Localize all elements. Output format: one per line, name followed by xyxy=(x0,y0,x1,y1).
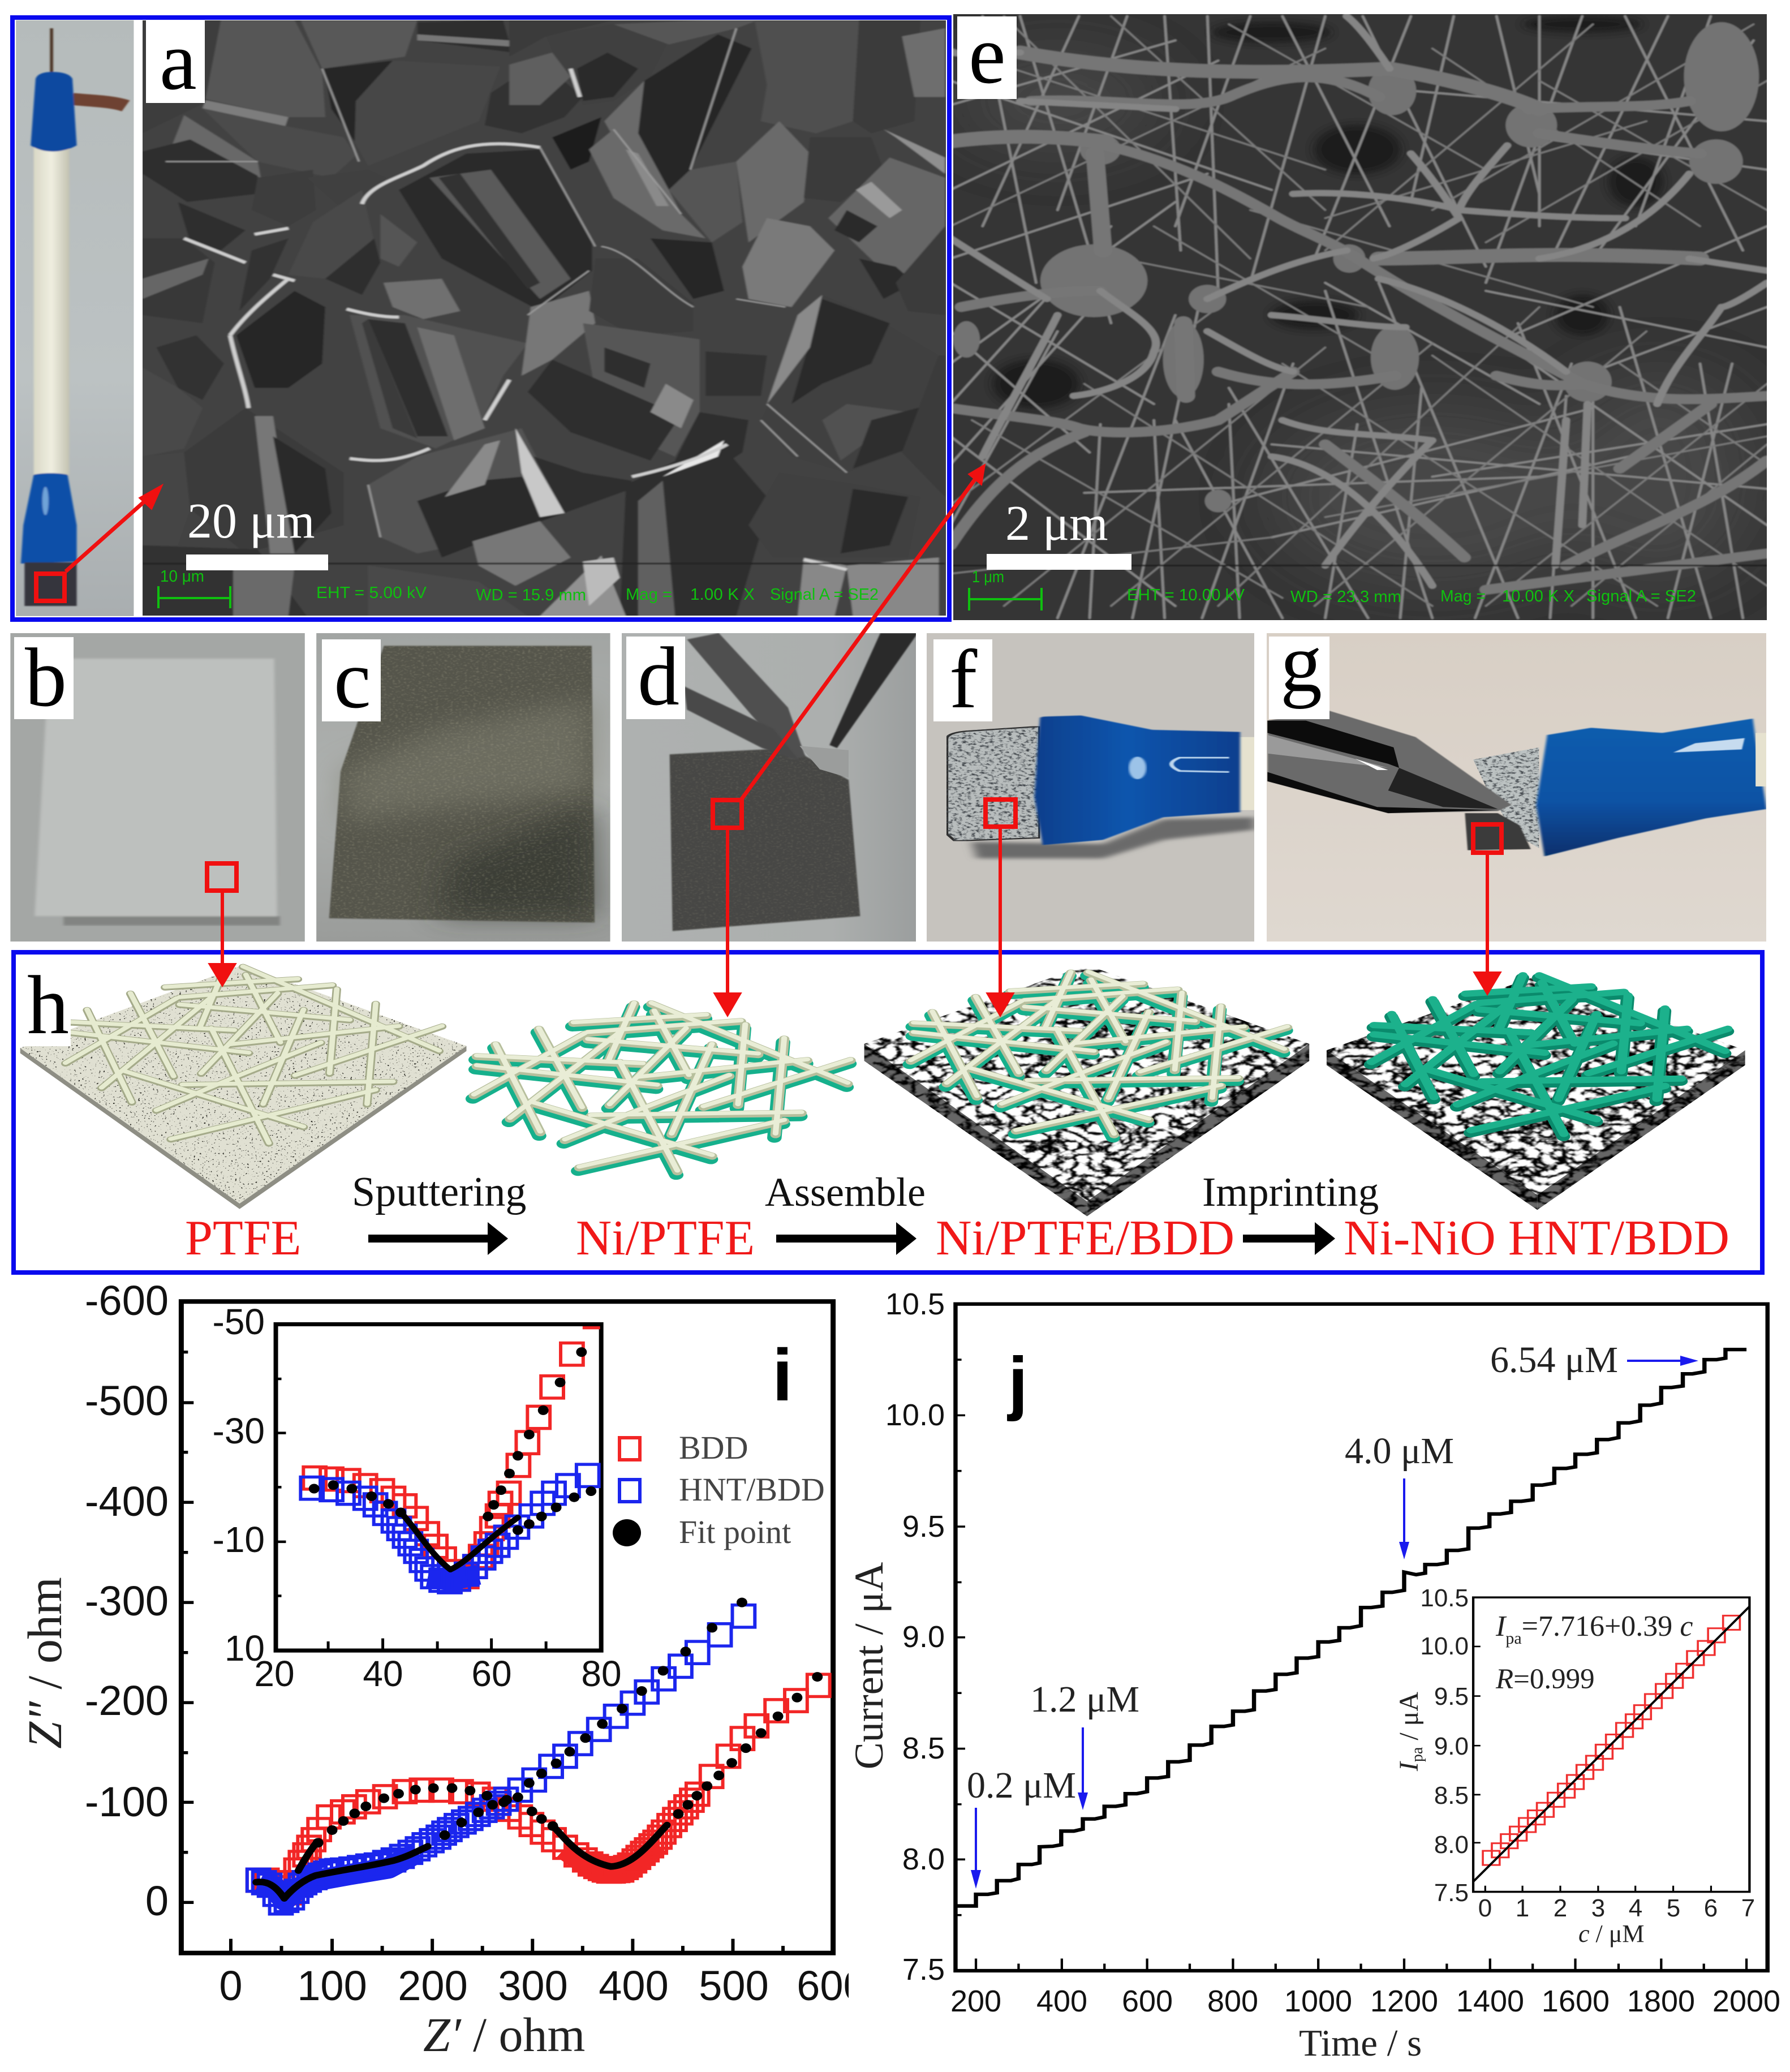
legend i xyxy=(613,1429,825,1550)
data: BDD squares xyxy=(259,1686,819,1893)
inset chart j: calibration: 3 xyxy=(1591,1894,1605,1922)
scale bar text a: 20 μm xyxy=(187,494,315,549)
label c xyxy=(322,633,381,726)
SEM info strip e: Mag = xyxy=(1440,587,1486,605)
panel frame a xyxy=(12,18,949,620)
annotation 1.2 μM xyxy=(1030,1679,1139,1810)
diagram: Ni/PTFE network xyxy=(473,1003,851,1175)
inset chart j: calibration: 10.5 xyxy=(1420,1584,1469,1612)
arrow: imprinting xyxy=(1243,1222,1335,1255)
annotation 4.0 μM: 4.0 μM xyxy=(1345,1430,1454,1472)
trace: current staircase xyxy=(956,1349,1746,1906)
scale bar e xyxy=(987,554,1131,570)
axis tick x labels i: 100 xyxy=(297,1962,367,2009)
y tick labels j: 8.5 xyxy=(902,1731,945,1765)
annotation 0.2 μM xyxy=(967,1765,1076,1889)
inset chart j: calibration: I xyxy=(1495,1610,1507,1643)
diagram: PTFE rods xyxy=(66,966,442,1144)
axis ticks y labels i: -300 xyxy=(85,1577,169,1624)
annotation 6.54 μM: 6.54 μM xyxy=(1490,1339,1618,1381)
label e xyxy=(957,8,1017,101)
inset tick labels i xyxy=(213,1301,622,1694)
inset tick labels i: 10 xyxy=(225,1628,265,1669)
y tick labels j: 10.0 xyxy=(885,1398,945,1432)
material label: PTFE: PTFE xyxy=(185,1211,301,1266)
axes and ticks i xyxy=(181,1301,833,1953)
inset chart j: calibration: 5 xyxy=(1667,1894,1680,1922)
data: fit points xyxy=(256,1602,817,1898)
inset chart j: calibration: c xyxy=(1680,1610,1693,1643)
axis title x j: Time / s xyxy=(1299,2022,1422,2064)
axis tick x labels i: 200 xyxy=(398,1962,468,2009)
square on d and arrow to e xyxy=(713,465,985,1016)
inset chart j: calibration: 8.5 xyxy=(1434,1782,1469,1809)
SEM info strip e: WD = 23.3 mm xyxy=(1290,588,1401,606)
axis ticks y labels i: -500 xyxy=(85,1377,169,1424)
label e: e xyxy=(969,8,1006,101)
axis ticks y labels i: -100 xyxy=(85,1778,169,1825)
inset tick labels i: -50 xyxy=(213,1301,265,1342)
x tick labels j: 1800 xyxy=(1627,1984,1695,2018)
x tick labels j xyxy=(950,1984,1780,2018)
annotation 1.2 μM: 1.2 μM xyxy=(1030,1679,1139,1720)
SEM info strip a: 10 μm xyxy=(160,568,204,586)
diagram: Ni-NiO HNT/BDD electrode xyxy=(1327,975,1745,1210)
legend i: Fit point xyxy=(679,1514,791,1550)
label d: d xyxy=(638,630,679,723)
scale bar text e: 2 μm xyxy=(1005,496,1108,551)
label g xyxy=(1269,617,1329,719)
inset chart j: calibration: I xyxy=(1394,1761,1424,1772)
legend i: BDD xyxy=(679,1429,748,1466)
SEM info strip e xyxy=(969,568,1696,611)
square on g and arrow to HNT/BDD xyxy=(1473,824,1501,995)
inset chart j: calibration: pa xyxy=(1505,1629,1522,1648)
axes and ticks j xyxy=(956,1304,1767,1971)
material label: Ni/PTFE: Ni/PTFE xyxy=(576,1210,755,1265)
label a: a xyxy=(160,15,197,108)
square on f and arrow to Ni/PTFE/BDD xyxy=(986,799,1016,1016)
icon: sleeve highlight xyxy=(42,487,49,515)
x tick labels j: 600 xyxy=(1122,1984,1173,2018)
arrow: sputtering xyxy=(368,1222,508,1255)
inset chart j: calibration: 2 xyxy=(1554,1894,1567,1922)
annotation 4.0 μM xyxy=(1345,1430,1454,1559)
SEM info strip a: EHT = 5.00 kV xyxy=(316,584,427,602)
SEM info strip e: 10.00 K X xyxy=(1502,587,1574,605)
y tick labels j: 9.5 xyxy=(902,1510,945,1544)
chart i: Nyquist plot xyxy=(18,1277,867,2062)
panel f: assembled electrode photo xyxy=(925,632,1257,944)
inset tick labels i: 80 xyxy=(581,1653,622,1694)
label f xyxy=(933,633,992,726)
arrow: assemble xyxy=(776,1222,916,1255)
inset tick labels i: -10 xyxy=(213,1519,265,1560)
icon: copper lead xyxy=(72,99,126,106)
step label: Assemble: Assemble xyxy=(765,1170,926,1215)
square on electrode tip and arrow to a xyxy=(36,485,162,601)
axis title x i: Z′ / ohm xyxy=(423,2007,585,2062)
axis ticks y labels i xyxy=(85,1277,169,1924)
panel h: fabrication schematic xyxy=(14,952,1762,1273)
y tick labels j: 7.5 xyxy=(902,1953,945,1987)
label c: c xyxy=(334,633,371,726)
axis title y i: Z″ / ohm xyxy=(18,1577,72,1749)
SEM info strip a: 1.00 K X xyxy=(690,586,755,604)
x tick labels j: 1000 xyxy=(1284,1984,1352,2018)
legend i: HNT/BDD xyxy=(679,1471,825,1508)
inset chart j: calibration: 8.0 xyxy=(1434,1831,1469,1859)
icon: blue lower sleeve xyxy=(21,473,77,564)
inset tick labels i: -30 xyxy=(213,1411,265,1451)
annotation 6.54 μM xyxy=(1490,1339,1698,1381)
frame h xyxy=(14,952,1762,1273)
icon: electrode cream tube xyxy=(34,145,70,475)
inset tick labels i: 20 xyxy=(254,1653,295,1694)
step label: Sputtering: Sputtering xyxy=(352,1169,526,1215)
inset chart j: calibration: 0 xyxy=(1478,1894,1492,1922)
label g: g xyxy=(1280,617,1322,710)
inset chart j: calibration: c / μM xyxy=(1578,1920,1644,1948)
x tick labels j: 200 xyxy=(950,1984,1001,2018)
panel label j: j xyxy=(1007,1343,1028,1422)
axis title y j: Current / μA xyxy=(846,1562,892,1769)
label h: h xyxy=(27,959,69,1052)
axis ticks y labels i: 0 xyxy=(145,1877,169,1924)
red callout arrows and zoom squares xyxy=(36,465,1501,1016)
axis ticks y labels i: -200 xyxy=(85,1677,169,1724)
axis tick x labels i: 600 xyxy=(797,1962,867,2009)
panel b: PTFE sheet photo xyxy=(10,633,305,942)
inset tick labels i: 40 xyxy=(363,1653,403,1694)
y tick labels j: 9.0 xyxy=(902,1620,945,1654)
inset chart j: calibration: 4 xyxy=(1629,1894,1642,1922)
axis tick x labels i: 300 xyxy=(498,1962,568,2009)
panel c: Ni coated sheet photo xyxy=(316,633,610,942)
SEM info strip e: Signal A = SE2 xyxy=(1586,587,1696,605)
annotation 0.2 μM: 0.2 μM xyxy=(967,1765,1076,1806)
inset chart j: calibration xyxy=(1394,1584,1755,1948)
square on b and arrow to PTFE xyxy=(207,863,236,986)
SEM info strip e: 1 μm xyxy=(972,568,1004,586)
SEM info strip a: Signal A = SE2 xyxy=(770,586,879,604)
SEM info strip a: WD = 15.9 mm xyxy=(476,586,586,604)
inset chart j: calibration: 9.5 xyxy=(1434,1683,1469,1710)
panel a: electrode photo xyxy=(16,20,134,616)
y tick labels j xyxy=(885,1287,945,1987)
axis ticks y labels i: -400 xyxy=(85,1478,169,1525)
label b: b xyxy=(25,631,67,724)
inset chart j: calibration: 10.0 xyxy=(1420,1632,1469,1660)
inset chart j: calibration: 9.0 xyxy=(1434,1733,1469,1760)
icon: blue upper sleeve xyxy=(31,72,77,152)
x tick labels j: 1200 xyxy=(1370,1984,1438,2018)
icon: electrode tip xyxy=(24,562,77,606)
step label: Imprinting: Imprinting xyxy=(1202,1169,1379,1215)
panel a: SEM image of BDD crystals xyxy=(138,18,954,620)
inset chart j: calibration: 1 xyxy=(1516,1894,1529,1922)
axis tick x labels i: 400 xyxy=(599,1962,669,2009)
y tick labels j: 8.0 xyxy=(902,1842,945,1876)
panel g: imprinting electrode with tweezers photo xyxy=(1265,632,1769,944)
SEM info strip a: Mag = xyxy=(626,586,672,604)
panel label i: i xyxy=(772,1334,793,1416)
axis tick x labels i: 500 xyxy=(699,1962,769,2009)
SEM info strip a xyxy=(158,568,879,608)
data: HNT/BDD squares xyxy=(259,1617,744,1903)
panel d: sheet held by tweezers photo xyxy=(622,633,922,942)
inset chart j: calibration: 6 xyxy=(1704,1894,1718,1922)
label a xyxy=(146,15,205,108)
x tick labels j: 800 xyxy=(1207,1984,1258,2018)
diagram: Ni/PTFE/BDD electrode xyxy=(864,965,1309,1216)
x tick labels j: 400 xyxy=(1036,1984,1087,2018)
inset chart j: calibration: 7 xyxy=(1741,1894,1755,1922)
axis ticks y labels i: -600 xyxy=(85,1277,169,1324)
diagram: PTFE membrane xyxy=(20,965,466,1209)
inset chart i xyxy=(276,1324,601,1650)
y tick labels j: 10.5 xyxy=(885,1287,945,1321)
material label: Ni/PTFE/BDD: Ni/PTFE/BDD xyxy=(936,1211,1234,1266)
inset chart j: calibration: / μA xyxy=(1394,1692,1424,1747)
icon: electrode wire xyxy=(50,28,53,73)
label f: f xyxy=(949,633,978,726)
axis tick x labels i xyxy=(221,1971,849,2001)
x tick labels j: 1600 xyxy=(1542,1984,1610,2018)
inset tick labels i: 60 xyxy=(471,1653,512,1694)
x tick labels j: 2000 xyxy=(1712,1984,1780,2018)
inset chart j: calibration: =7.716+0.39 xyxy=(1522,1610,1680,1643)
SEM info strip e: EHT = 10.00 kV xyxy=(1127,586,1245,604)
material label: Ni-NiO HNT/BDD: Ni-NiO HNT/BDD xyxy=(1344,1211,1729,1266)
panel e: SEM image of nanofibers xyxy=(948,12,1772,622)
inset chart j: calibration: R=0.999 xyxy=(1495,1663,1595,1695)
axis tick x labels i: 0 xyxy=(219,1962,243,2009)
scale bar a xyxy=(186,554,328,570)
inset chart j: calibration: 7.5 xyxy=(1434,1879,1469,1907)
x tick labels j: 1400 xyxy=(1456,1984,1524,2018)
chart j: amperometric response xyxy=(846,1287,1780,2064)
inset chart j: calibration: pa xyxy=(1409,1747,1426,1762)
